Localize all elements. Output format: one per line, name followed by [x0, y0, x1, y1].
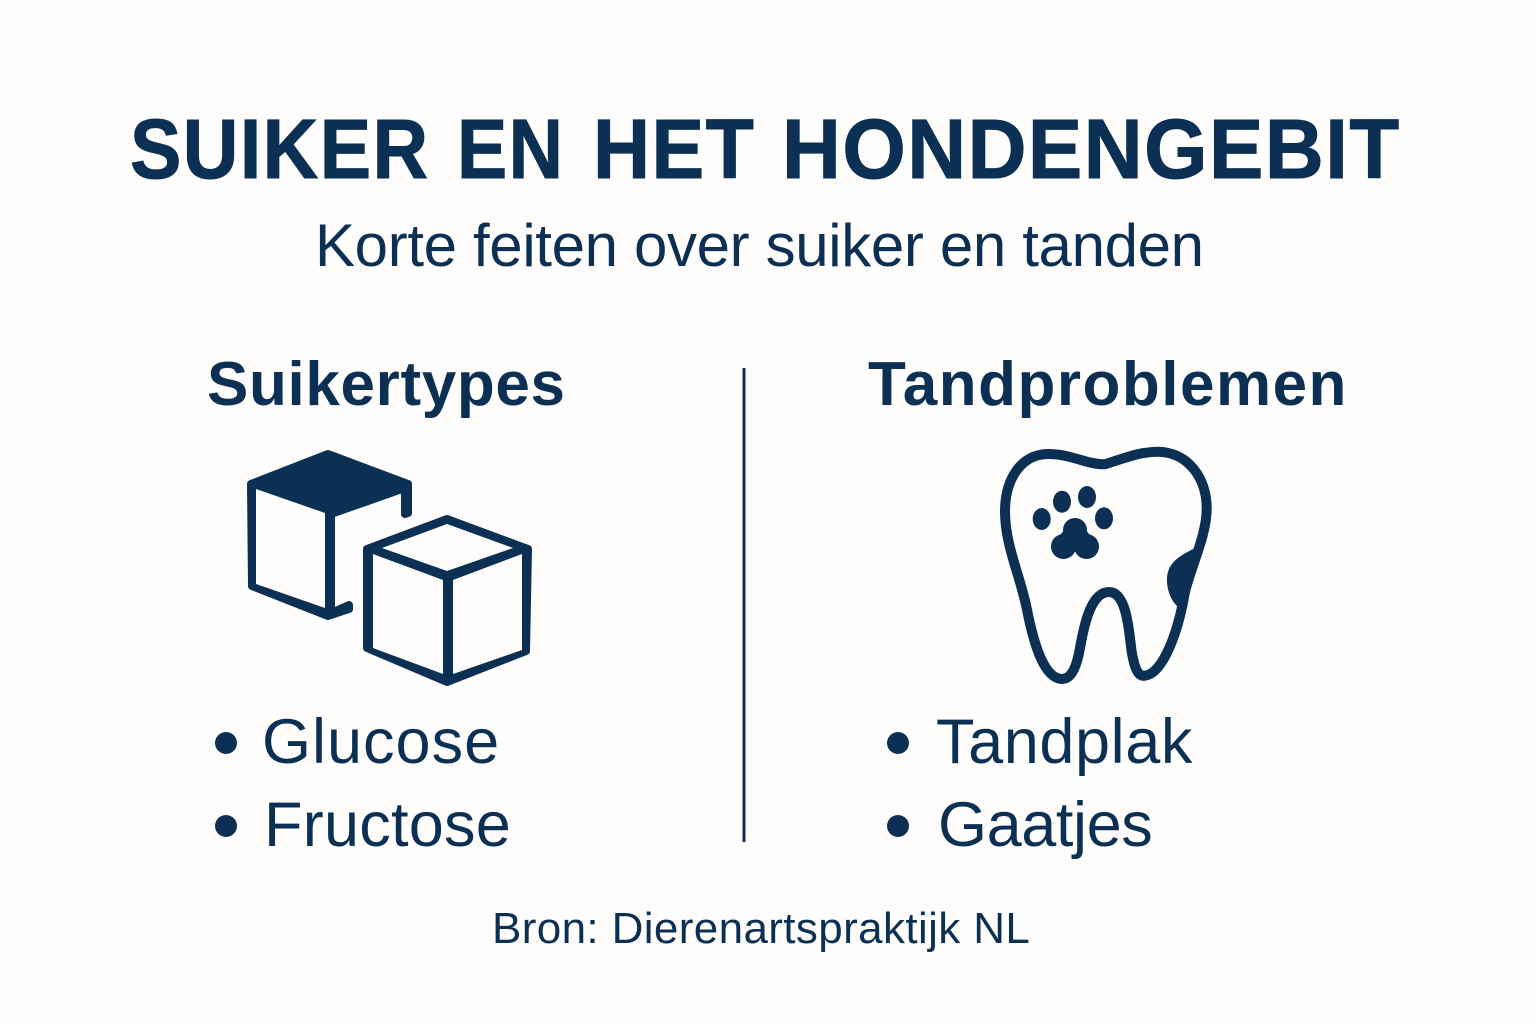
subtitle: Korte feiten over suiker en tanden [315, 212, 1204, 279]
bullets: right list [887, 732, 909, 837]
paw print [1033, 486, 1113, 559]
bullets: left list [215, 732, 237, 837]
icon: front cube [367, 519, 528, 682]
title: SUIKER [130, 102, 430, 196]
list item: Fructose: Fructose [264, 790, 511, 860]
title: HET [593, 102, 755, 196]
decay spot [1167, 545, 1200, 608]
icon: tooth with paw print [1005, 452, 1207, 679]
icon: back cube [251, 454, 408, 616]
list item: Tandplak: Tandplak [936, 707, 1193, 777]
source: Bron: Dierenartspraktijk NL [492, 904, 1030, 953]
title: HONDENGEBIT [782, 102, 1401, 196]
list item: Glucose: Glucose [262, 707, 500, 777]
icon: sugar cubes [251, 454, 528, 682]
list item: Gaatjes: Gaatjes [938, 790, 1152, 860]
heading: Tandproblemen: Tandproblemen [868, 350, 1348, 419]
heading: Suikertypes: Suikertypes [207, 350, 566, 419]
title [130, 102, 1401, 196]
title: EN [457, 102, 564, 196]
tooth outline [1005, 452, 1207, 679]
